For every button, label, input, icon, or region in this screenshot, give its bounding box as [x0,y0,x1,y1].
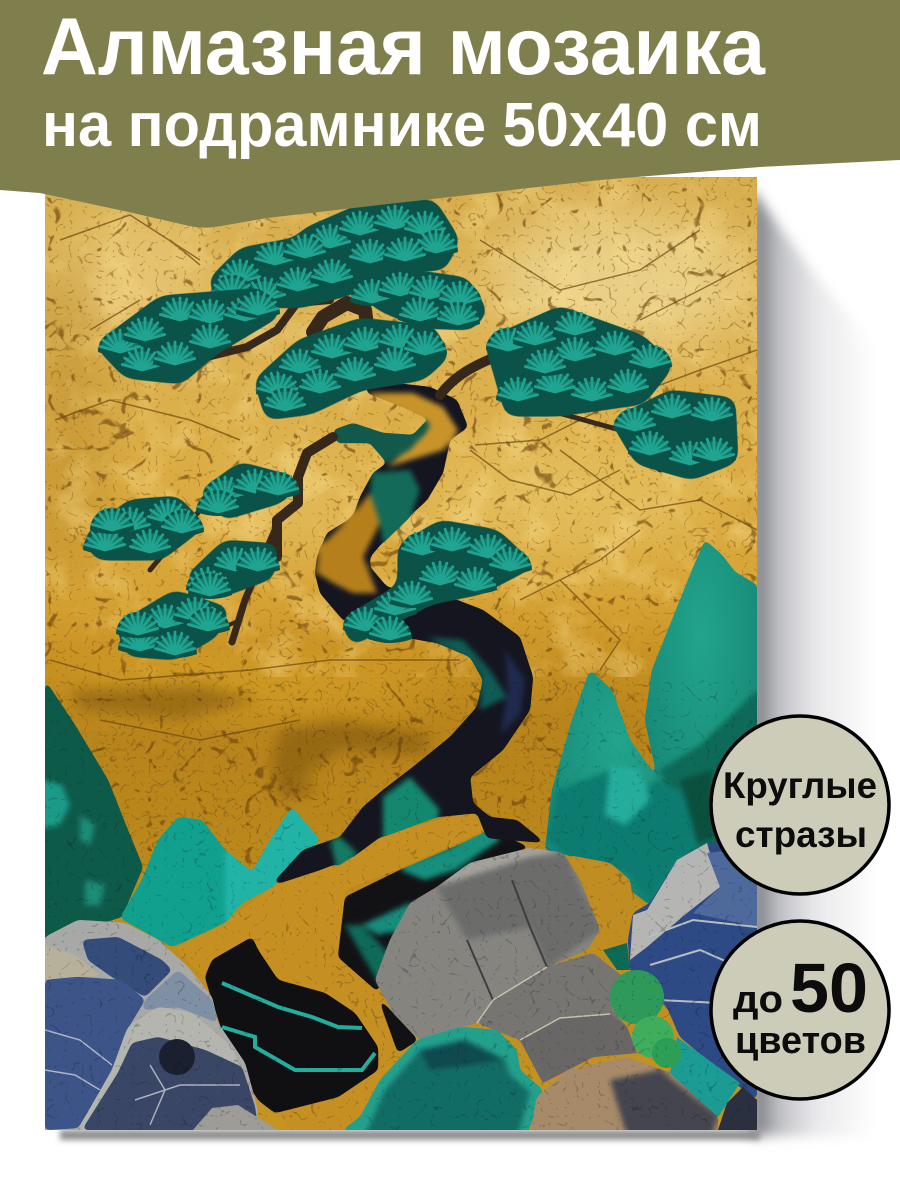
foliage: lower right branch [340,520,536,646]
gold leaf background [25,177,757,1130]
canvas shadow [60,186,875,1140]
teal corner [670,1037,757,1130]
gold path right [570,856,632,892]
base green patch [383,777,440,837]
title line 2: на подрамнике 50х40 см [42,91,762,160]
gold foreground path [210,814,484,930]
badge: round rhinestones: стразы [735,814,867,855]
badge: up to 50 colours [711,921,889,1099]
grey boulder lower [477,953,637,1083]
left rocks [45,920,278,1130]
tree trunk [273,380,545,883]
foliage: top crown [208,200,460,308]
green shrub [610,970,682,1068]
teal mountains right [545,540,757,905]
dark green mountain left [45,680,143,940]
blue flecks [500,650,525,735]
green side branch [333,420,430,463]
gold upper section [367,393,458,467]
teal inner stripe [427,637,507,710]
badge: up to 50 colours: до [733,979,783,1021]
badge: up to 50 colours: цветов [735,1020,866,1062]
green patch above shrub [603,943,630,970]
foliage: left arm [94,288,282,384]
foliage: right arm [484,306,674,416]
tree branches [150,262,660,652]
badge: round rhinestones [711,716,889,894]
black pool [205,937,378,1113]
small base patch [330,837,357,867]
foliage: center [254,318,450,420]
gold leaf cracks [50,215,757,740]
foliage: right of crown [350,268,488,330]
foliage: far right [610,390,738,480]
darker tarnished band [70,685,430,800]
gold trunk section [317,493,380,593]
badge: up to 50 colours: 50 [790,949,868,1027]
badge: round rhinestones: Круглые [723,765,877,806]
teal rock [345,1027,543,1135]
small teal mountains [120,807,320,947]
banner [0,0,900,228]
grey boulder [375,848,600,1040]
brown rock [530,1057,718,1135]
green trunk section [370,470,420,543]
dark stream with teal [338,828,530,1053]
mosaic texture [45,680,757,1130]
title line 1: Алмазная мозаика [41,2,766,92]
foliage: lower left branches [82,462,300,660]
painting [25,177,757,1135]
blue rock right [628,840,757,1100]
boulder cracks [467,880,547,1000]
